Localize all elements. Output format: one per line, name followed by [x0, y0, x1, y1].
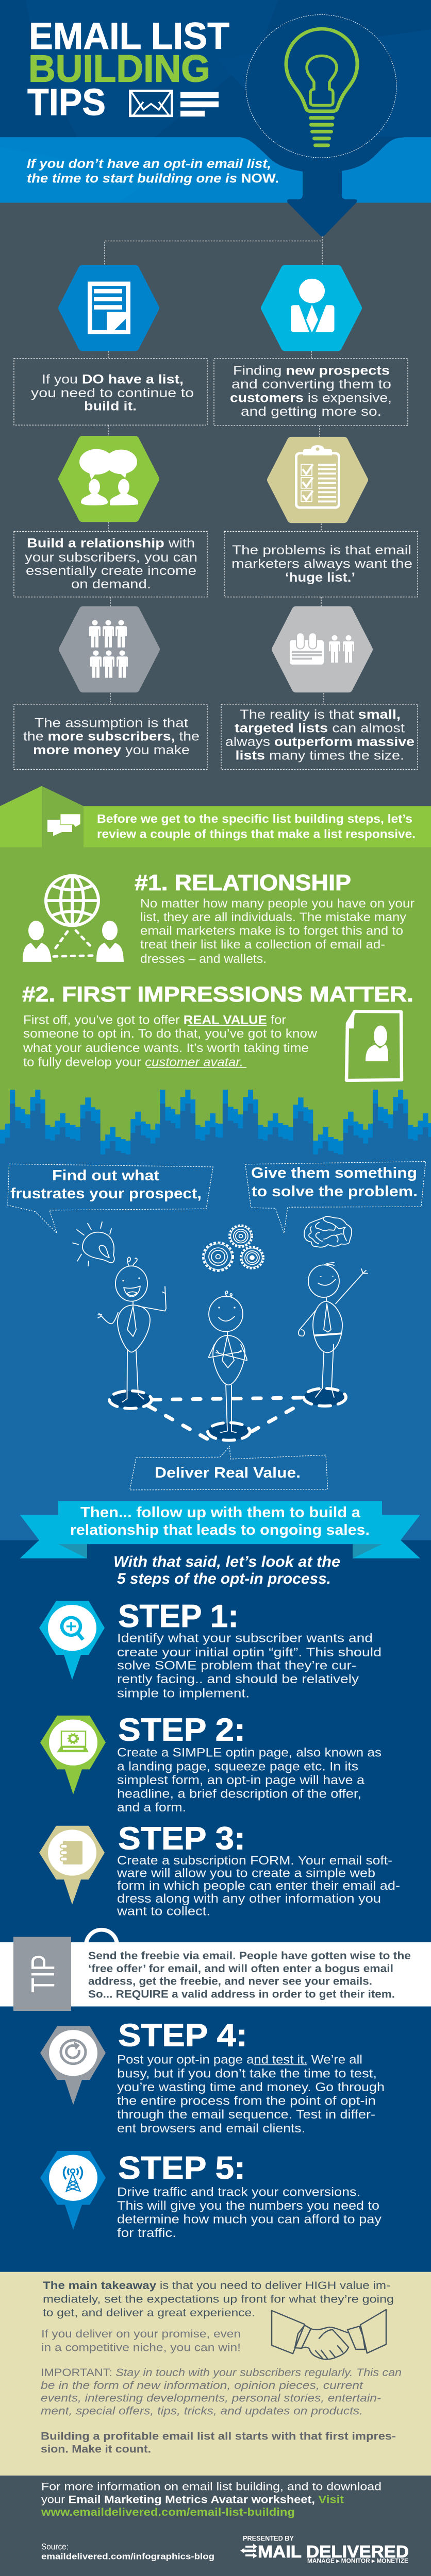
tip text: So... REQUIRE a valid address in order to get their item. [88, 1988, 395, 2000]
panel: relationship: #1. RELATIONSHIP [135, 870, 351, 895]
pin icon: signal tower [40, 2151, 106, 2230]
doodle: brain [304, 1216, 352, 1247]
body text [140, 897, 415, 966]
text box: The reality is that small, [240, 707, 401, 722]
step text [117, 1632, 382, 1701]
step 4 [40, 2018, 385, 2136]
hexagon icon: clipboard checklist [271, 441, 364, 519]
body text: treat their list like a collection of email ad- [140, 938, 385, 952]
speech bubble: find out: frustrates your prospect, [10, 1186, 202, 1202]
step 2 [40, 1713, 382, 1815]
green section background [0, 847, 431, 1141]
panel: first impressions: #2. FIRST IMPRESSIONS MATTER. [22, 982, 413, 1007]
pin icon: magnifier [39, 1601, 105, 1680]
title: BUILDING [28, 47, 210, 90]
text box: on demand. [71, 578, 151, 591]
speech bubble: deliver real value: Deliver Real Value. [155, 1465, 301, 1481]
step text: rently facing.. and should be relatively [117, 1673, 359, 1686]
logo: presented by Email Delivered: MANAGE ▸ MONITOR ▸ MONETIZE [307, 2557, 408, 2564]
tip text [88, 1950, 411, 2000]
banner: review list: Before we get to the specific list building steps, let’s [97, 812, 412, 825]
text box [14, 359, 207, 425]
icon: avatar profile sheet [345, 1010, 402, 1080]
body text: No matter how many people you have on your [140, 897, 415, 910]
step text: the entire process from the point of opt-in [117, 2094, 376, 2108]
important text: ment, special offers, tips, tricks, and updates on products. [41, 2405, 363, 2417]
speech bubble: find out [8, 1164, 213, 1233]
step text: and a form. [117, 1801, 186, 1815]
speech bubble: give them something: Give them something [251, 1165, 417, 1181]
hexagon icon: person [265, 269, 358, 347]
text box: marketers always want the [231, 557, 412, 571]
text box: ‘huge list.’ [285, 570, 355, 585]
step text: Create a SIMPLE optin page, also known as [117, 1746, 382, 1760]
speech bubble: give them something: to solve the problem. [252, 1184, 418, 1200]
text box: and converting them to [231, 377, 391, 392]
tip text: Send the freebie via email. People have gotten wise to the [88, 1950, 411, 1962]
logo: presented by Email Delivered [240, 2535, 409, 2564]
source: emaildelivered.com/infographics-blog [41, 2552, 214, 2562]
ribbon banner: relationship that leads to ongoing sales. [70, 1522, 370, 1538]
text box [214, 359, 408, 426]
arrow shape from bulb [238, 137, 407, 236]
text box: Build a relationship with [27, 536, 195, 551]
connector lines [105, 236, 324, 704]
title: EMAIL LIST [29, 15, 229, 57]
icon: handshake [272, 2310, 386, 2359]
icon: envelope and text lines [130, 91, 219, 116]
step text [117, 1854, 400, 1919]
pin icon: refresh [40, 2026, 106, 2105]
figure: left stick man [98, 1257, 166, 1402]
step text: a landing page, squeeze page etc. In its [117, 1760, 358, 1773]
hexagon icon: conversation [62, 440, 155, 518]
panel: reality [221, 610, 418, 769]
important text [41, 2367, 402, 2417]
panel: main takeaway [0, 2272, 431, 2476]
step text: form in which people can enter their email ad- [117, 1879, 400, 1893]
step text: simple to implement. [117, 1687, 250, 1701]
important text: events, interesting developments, personal stories, entertain- [41, 2392, 381, 2404]
header background [0, 0, 431, 138]
text box: Finding new prospects [233, 364, 390, 378]
body text: someone to opt in. To do that, you’ve got to know [23, 1027, 317, 1041]
step text: ent browsers and email clients. [117, 2122, 305, 2136]
source: Source: [41, 2542, 69, 2552]
step text: Create a subscription FORM. Your email soft- [117, 1854, 392, 1868]
subtitle text [27, 157, 279, 185]
step text: Post your opt-in page and test it. We’re all [117, 2053, 362, 2067]
subtitle band [0, 137, 431, 203]
hexagon icon: six people [63, 610, 156, 689]
text box: targeted lists can almost [235, 721, 405, 735]
pin icon: notebook [39, 1826, 105, 1905]
step 1: STEP 1: [118, 1599, 239, 1634]
grey section background [0, 203, 431, 810]
step 3 [39, 1821, 400, 1919]
text box [14, 531, 207, 597]
text box: essentially create income [26, 564, 196, 578]
icon: light bulb [246, 15, 396, 158]
hexagon icon: document [62, 269, 155, 347]
promise text: If you deliver on your promise, even [41, 2328, 241, 2340]
intro heading: With that said, let’s look at the [113, 1554, 340, 1570]
tip text: ‘free offer’ for email, and will often enter a bogus email [88, 1962, 393, 1975]
text box: you need to continue to [31, 386, 194, 400]
text box: customers is expensive, [230, 391, 392, 405]
title [27, 15, 229, 123]
panel: huge list [224, 441, 418, 597]
step text: through the email sequence. Test in differ- [117, 2108, 375, 2122]
step text: for traffic. [117, 2227, 176, 2240]
text box: and getting more so. [241, 405, 382, 419]
call to action: For more information on email list building, and to download [41, 2481, 382, 2493]
step text: create your initial optin “gift”. This should [117, 1646, 382, 1659]
step text: dress along with any other information you [117, 1892, 381, 1906]
step text: ware will allow you to create a simple web [117, 1867, 375, 1880]
promise text [41, 2328, 241, 2354]
important text: be in the form of new information, opinion pieces, current [41, 2379, 363, 2392]
step text: This will give you the numbers you need to [117, 2199, 379, 2213]
closing text [41, 2430, 396, 2455]
banner: review list: review a couple of things that make a list responsive. [97, 827, 416, 840]
tip text: address, get the freebie, and never see your emails. [88, 1975, 372, 1988]
figure: middle stick man [209, 1291, 247, 1432]
closing text: Building a profitable email list all starts with that first impres- [41, 2430, 396, 2443]
tip ring [86, 1930, 117, 1961]
text box [224, 531, 418, 597]
ribbon banner [20, 1501, 420, 1558]
step 4: STEP 4: [118, 2018, 247, 2053]
title: TIPS [27, 81, 106, 123]
speech bubble: find out: Find out what [52, 1168, 159, 1184]
step text: headline, a brief description of the offer, [117, 1787, 361, 1801]
takeaway text [43, 2279, 394, 2319]
body text: what your audience wants. It’s worth taking time [23, 1041, 309, 1055]
tip tab [13, 1937, 71, 2011]
panel: build a relationship [14, 440, 207, 597]
step text [117, 2053, 385, 2136]
panel: new prospects [214, 269, 408, 426]
step 5 [40, 2151, 382, 2240]
body text: First off, you’ve got to offer REAL VALUE for [23, 1013, 286, 1027]
panel: relationship [23, 870, 415, 966]
step 5: STEP 5: [118, 2151, 245, 2186]
step 3: STEP 3: [118, 1821, 245, 1856]
call to action: your Email Marketing Metrics Avatar worksheet, Visit [41, 2494, 344, 2505]
logo: presented by Email Delivered: PRESENTED BY [243, 2535, 294, 2543]
ribbon banner: Then... follow up with them to build a [80, 1505, 361, 1521]
tip tab: TIP [25, 1955, 61, 1993]
text box: build it. [84, 399, 137, 413]
doodle: light bulb [73, 1222, 114, 1266]
call to action [41, 2481, 382, 2518]
hexagon icon: list and two people [276, 610, 369, 689]
banner: review list [0, 786, 431, 847]
text box: more money you make [33, 743, 190, 757]
closing text: sion. Make it count. [41, 2443, 151, 2455]
body text: to fully develop your customer avatar. [23, 1056, 243, 1069]
text box [221, 704, 418, 769]
text box: If you DO have a list, [42, 372, 184, 386]
footer [0, 2476, 431, 2576]
takeaway text: The main takeaway is that you need to deliver HIGH value im- [43, 2279, 390, 2292]
text box: always outperform massive [225, 735, 415, 749]
dark blue steps background [0, 1540, 431, 2273]
takeaway text: to get, and deliver a great experience. [43, 2307, 255, 2319]
step text: determine how much you can afford to pay [117, 2213, 382, 2226]
text box: your subscribers, you can [25, 550, 197, 565]
panel: do have a list [14, 269, 207, 425]
step text [117, 2185, 382, 2240]
intro heading [113, 1554, 340, 1587]
step 1 [39, 1599, 382, 1701]
source [41, 2542, 214, 2562]
body text: dresses – and wallets. [140, 952, 267, 966]
step text: solve SOME problem that they’re cur- [117, 1659, 356, 1672]
doodle: gears [203, 1225, 263, 1271]
text box: The problems is that email [232, 544, 411, 557]
subtitle text: If you don’t have an opt-in email list, [27, 157, 271, 171]
step text: you’re wasting time and money. Go through [117, 2080, 385, 2094]
step 2: STEP 2: [118, 1713, 245, 1748]
body text: email marketers make is to forget this and to [140, 924, 403, 938]
text box: the more subscribers, the [23, 730, 200, 743]
skyline [0, 1090, 431, 1540]
body text [23, 1013, 317, 1069]
intro heading: 5 steps of the opt-in process. [117, 1571, 331, 1587]
subtitle text: the time to start building one is NOW. [27, 172, 279, 185]
pin icon: laptop [40, 1716, 106, 1794]
icon: globe with two people [23, 876, 124, 962]
logo: presented by Email Delivered: MAIL DELIVERED [258, 2543, 409, 2562]
tip panel [0, 1937, 431, 2011]
important text: IMPORTANT: Stay in touch with your subscribers regularly. This can [41, 2367, 402, 2379]
panel: first impressions [22, 982, 413, 1080]
promise text: in a competitive niche, you can win! [41, 2342, 241, 2354]
connection platforms [109, 1388, 346, 1440]
call to action: www.emaildelivered.com/email-list-building [41, 2506, 295, 2518]
figure: right stick man [299, 1263, 368, 1397]
step text [117, 1746, 382, 1815]
step text: Drive traffic and track your conversions. [117, 2185, 360, 2199]
text box [14, 704, 207, 769]
step text: simplest form, an opt-in page will have a [117, 1773, 364, 1787]
text box: The assumption is that [35, 716, 188, 730]
text box: lists many times the size. [235, 749, 404, 762]
icon: speech bubbles [47, 814, 80, 836]
takeaway text: mediately, set the expectations up front for what they’re going [43, 2293, 394, 2305]
step text: want to collect. [117, 1905, 210, 1919]
step text: busy, but if you don’t take the time to test, [117, 2067, 377, 2080]
panel: assumption [14, 610, 207, 769]
body text: list, they are all individuals. The mistake many [140, 911, 407, 924]
speech bubble: give them something [245, 1161, 426, 1233]
step text: Identify what your subscriber wants and [117, 1632, 373, 1645]
speech bubble: deliver real value [130, 1446, 328, 1490]
